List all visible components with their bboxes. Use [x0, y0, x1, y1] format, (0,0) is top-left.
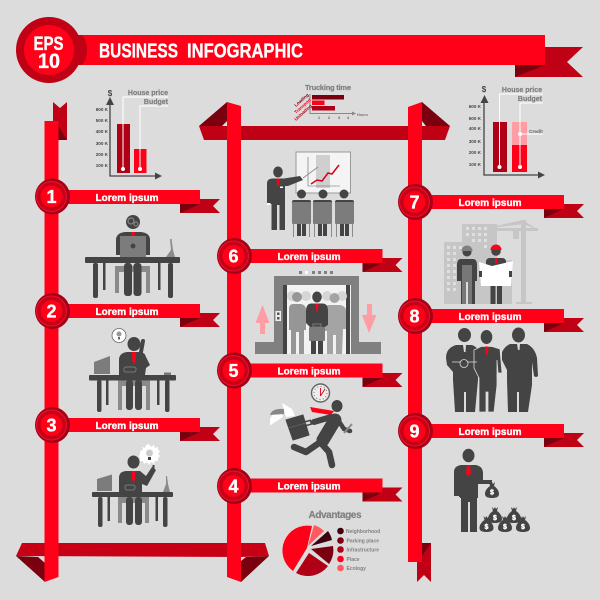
- banner 4: Lorem ipsum: [278, 482, 341, 492]
- icon: man at desk with gears: [85, 215, 180, 298]
- icon: man on phone at desk: [89, 328, 176, 412]
- badge 7: 7: [409, 192, 420, 212]
- badge 6: [217, 238, 252, 274]
- banner 2: Lorem ipsum: [96, 307, 159, 318]
- ribbon: left vertical: [44, 121, 58, 582]
- chart: house price left: 600 K: [96, 107, 109, 112]
- chart: house price left: $: [108, 89, 113, 98]
- header badge EPS 10: 10: [38, 50, 60, 73]
- chart: house price right: 500 K: [469, 116, 482, 121]
- money bags pile: $: [493, 515, 497, 522]
- chart: house price left: [96, 89, 169, 180]
- pie slices: [282, 525, 333, 576]
- title: BUSINESS: [99, 40, 178, 62]
- chart: trucking time: Loading: [293, 92, 310, 108]
- chart: house price left: 400 K: [96, 129, 109, 134]
- chart: trucking time: Unloading: [293, 103, 313, 122]
- pie legend: Ecology: [346, 566, 366, 572]
- icon: presentation scene: [267, 152, 354, 237]
- chart: house price right: House price: [502, 87, 542, 94]
- money bags pile: $: [512, 515, 516, 522]
- badge 3: [35, 407, 70, 443]
- ribbon: middle vertical: [227, 102, 241, 582]
- chart: house price left: 100 K: [96, 163, 109, 168]
- icon: construction workers: [444, 220, 538, 304]
- chart: house price right: [469, 85, 545, 178]
- chart: house price right: Credit: [529, 129, 543, 135]
- chart: house price left: 200 K: [96, 152, 109, 157]
- banner 6: [248, 249, 402, 272]
- icon: elevator scene: [255, 271, 381, 354]
- banner 7: [430, 195, 584, 218]
- badge 5: [217, 352, 252, 388]
- banner 8: [430, 309, 584, 332]
- badge 3: 3: [46, 416, 57, 436]
- badge 1: [35, 178, 70, 214]
- money bags pile: [480, 507, 530, 532]
- arrow: up: [256, 305, 270, 334]
- pie legend: [337, 528, 380, 572]
- banner 1: [65, 190, 220, 213]
- pie chart: advantages: Advantages: [308, 510, 362, 521]
- banner 8: Lorem ipsum: [458, 312, 522, 323]
- ribbon: right column flag: [417, 543, 431, 582]
- passengers: [289, 292, 346, 354]
- icon: running businessman: [270, 384, 352, 465]
- pie legend: Parking place: [346, 538, 379, 544]
- badge 8: [398, 298, 433, 334]
- chart: house price left: 500 K: [96, 118, 109, 123]
- worker with blueprint: [479, 245, 513, 304]
- chart: trucking time: Trucking time: [305, 83, 351, 92]
- banner 6: Lorem ipsum: [278, 252, 341, 263]
- chart: house price left: House price: [128, 90, 168, 97]
- banner 4: [248, 478, 402, 502]
- chart: house price left: Budget: [144, 99, 169, 106]
- chart: trucking time: Hours: [357, 113, 368, 117]
- banner 3: Lorem ipsum: [96, 421, 159, 432]
- banner 2: [65, 304, 220, 327]
- header badge EPS 10: [16, 17, 82, 83]
- chart: house price right: 200 K: [469, 150, 482, 155]
- chart: trucking time: 2: [328, 115, 331, 120]
- money bags pile: $: [503, 524, 507, 531]
- seated audience: [292, 190, 354, 237]
- badge 5: 5: [228, 361, 239, 381]
- badge 8: 8: [409, 306, 420, 326]
- banner 9: [430, 424, 584, 447]
- icon: man with idea at desk: [92, 444, 173, 527]
- icon: businessman with money bags: [454, 449, 530, 532]
- buildings and crane: [444, 220, 538, 304]
- icon: three businessmen: [446, 328, 538, 412]
- chart: trucking time: 1: [318, 115, 321, 120]
- chart: house price right: $: [482, 85, 487, 94]
- chart: house price right: Budget: [518, 96, 543, 103]
- badge 9: 9: [409, 422, 420, 442]
- money bags pile: $: [521, 524, 525, 531]
- worker with overalls: [457, 246, 477, 304]
- money bags pile: $: [485, 524, 489, 531]
- title: [99, 40, 303, 62]
- title: INFOGRAPHIC: [187, 40, 303, 62]
- badge 4: [217, 468, 252, 504]
- chart: trucking time: Transport: [293, 97, 312, 115]
- chart: house price right: 300 K: [469, 139, 482, 144]
- chart: house price right: 100 K: [469, 162, 482, 167]
- pie chart: advantages: [282, 510, 380, 576]
- arrow: down: [362, 304, 376, 333]
- badge 6: 6: [228, 246, 239, 266]
- banner 1: Lorem ipsum: [96, 193, 159, 204]
- header badge EPS 10: EPS: [34, 34, 64, 55]
- pie legend: Place: [346, 557, 360, 563]
- pie legend: Infrastructure: [346, 548, 379, 554]
- banner 7: Lorem ipsum: [458, 198, 522, 209]
- ribbon: right vertical: [408, 102, 422, 562]
- ribbon: left column flag: [53, 102, 67, 140]
- badge 1: 1: [46, 187, 57, 207]
- chart: house price right: 400 K: [469, 126, 482, 131]
- header banner: [73, 35, 583, 77]
- chart: trucking time: 4: [347, 115, 350, 120]
- chart: trucking time: [293, 83, 368, 122]
- banner 9: Lorem ipsum: [458, 427, 522, 438]
- icon: businessman with money bags: $: [490, 490, 494, 496]
- chart: trucking time: 3: [338, 115, 341, 120]
- banner 5: [248, 364, 402, 387]
- chart: house price right: 600 K: [469, 104, 482, 109]
- badge 4: 4: [228, 476, 239, 496]
- banner 3: [65, 418, 220, 441]
- badge 7: [398, 184, 433, 220]
- chart: house price left: 300 K: [96, 141, 109, 146]
- badge 2: 2: [46, 302, 57, 322]
- pie legend: Neighborhood: [346, 529, 380, 535]
- ribbon: bottom horizontal: [16, 543, 269, 582]
- ribbon: middle top horizontal: [199, 102, 450, 140]
- banner 5: Lorem ipsum: [278, 366, 341, 378]
- badge 2: [35, 293, 70, 329]
- badge 9: [398, 413, 433, 449]
